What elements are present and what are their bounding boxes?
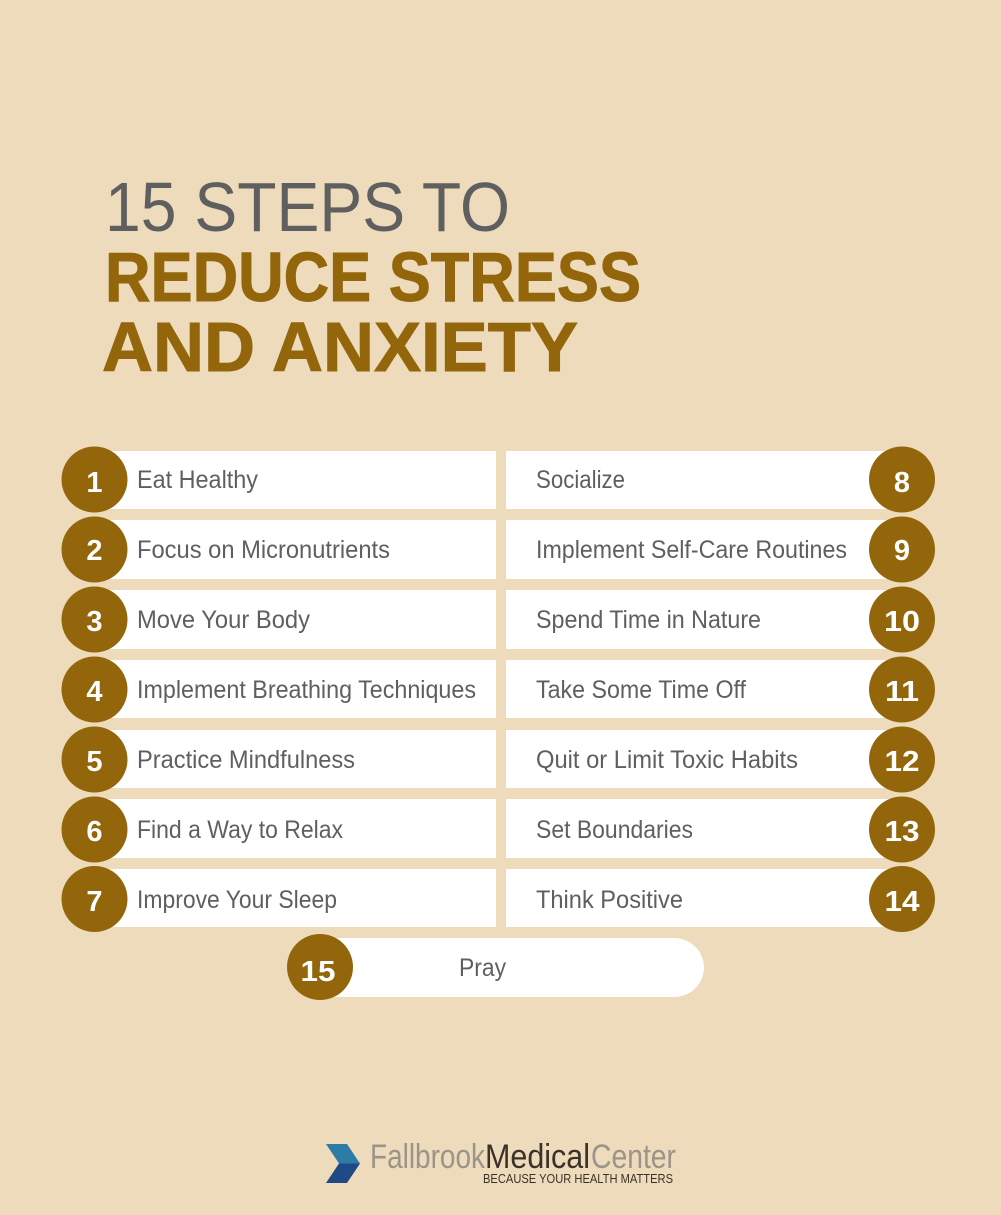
step 1: Eat Healthy — [137, 466, 258, 494]
step 3 — [62, 586, 496, 652]
step 9: Implement Self-Care Routines — [536, 536, 847, 564]
step 2: Focus on Micronutrients — [137, 536, 390, 564]
step 14: 14 — [884, 886, 920, 918]
icon: chevron — [326, 1144, 360, 1183]
logo: Fallbrook Medical Center: Medical — [485, 1138, 590, 1176]
step 13: 13 — [884, 816, 920, 848]
step 15: 15 — [300, 956, 336, 988]
step 10: 10 — [884, 606, 920, 638]
step 10 — [506, 586, 935, 652]
step 7: 7 — [86, 886, 103, 918]
step 3: 3 — [86, 606, 103, 638]
step 14 — [506, 866, 935, 932]
step 9 — [506, 516, 935, 582]
step 11 — [506, 656, 935, 722]
title: 15 STEPS TO — [105, 168, 510, 246]
step 12: 12 — [884, 746, 920, 778]
step 10: Spend Time in Nature — [536, 606, 761, 634]
step 7: Improve Your Sleep — [137, 886, 337, 914]
step 1: 1 — [86, 467, 103, 499]
step 13: Set Boundaries — [536, 816, 693, 844]
logo: Fallbrook Medical Center: Fallbrook — [370, 1138, 486, 1176]
step 8: 8 — [894, 467, 910, 499]
step 13 — [506, 796, 935, 862]
step 5 — [62, 726, 496, 792]
step 4: Implement Breathing Techniques — [137, 676, 476, 704]
step 7 — [62, 866, 496, 932]
logo: Fallbrook Medical Center: BECAUSE YOUR HEALTH MATTERS — [483, 1171, 673, 1186]
step 11: Take Some Time Off — [536, 676, 746, 704]
step 12 — [506, 726, 935, 792]
step 4: 4 — [86, 676, 103, 708]
logo: Fallbrook Medical Center — [326, 1138, 676, 1186]
step 8 — [506, 446, 935, 512]
step 6: Find a Way to Relax — [137, 816, 343, 844]
step 9: 9 — [894, 535, 910, 567]
title: REDUCE STRESS — [105, 238, 641, 316]
step 5: Practice Mindfulness — [137, 746, 355, 774]
step 8: Socialize — [536, 466, 625, 494]
step 2: 2 — [86, 535, 103, 567]
step 3: Move Your Body — [137, 606, 310, 634]
step 6 — [62, 796, 496, 862]
step 4 — [62, 656, 496, 722]
step 1 — [62, 446, 496, 512]
step 11: 11 — [885, 676, 919, 708]
title — [102, 168, 641, 386]
logo: Fallbrook Medical Center: Center — [591, 1138, 676, 1176]
title: AND ANXIETY — [102, 308, 578, 386]
step 5: 5 — [86, 746, 103, 778]
step 6: 6 — [86, 816, 103, 848]
step 14: Think Positive — [536, 886, 683, 914]
step 12: Quit or Limit Toxic Habits — [536, 746, 798, 774]
step 15: Pray — [459, 954, 506, 982]
step 2 — [62, 516, 496, 582]
step 15 — [287, 934, 704, 1000]
